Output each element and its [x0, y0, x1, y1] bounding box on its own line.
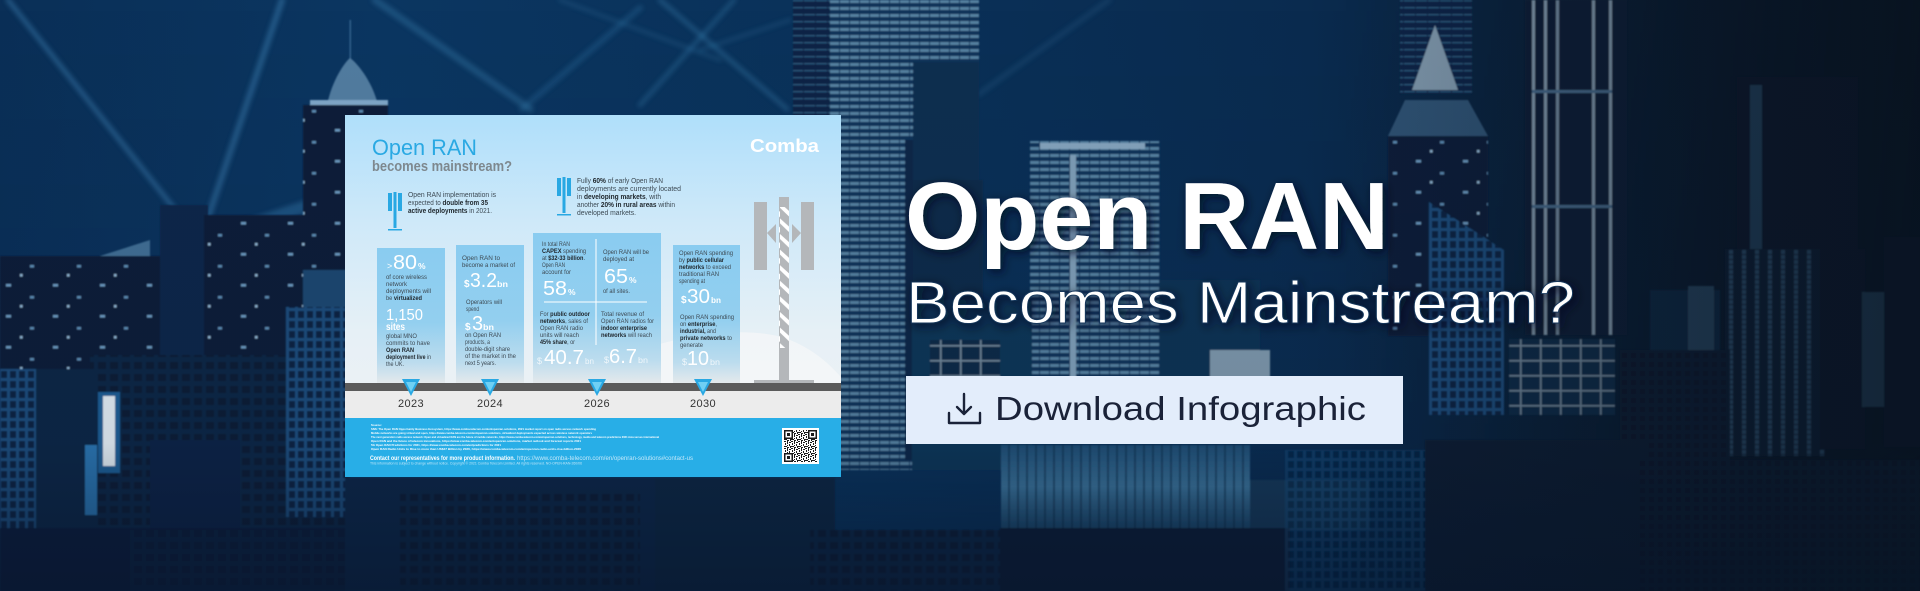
year labels: 2023	[398, 398, 424, 410]
sources text: Open RAN Radio Units to Rise to more than US$47 Billion by 2026, https://www.comba-telecom.com/en/openran-radio-units-rise-billion-2026	[371, 447, 581, 451]
card: 2023	[377, 248, 445, 383]
card: 2030: generate	[680, 343, 704, 349]
contact line: Contact our representatives for more product information.	[370, 455, 515, 462]
card: 2026: $	[537, 356, 542, 366]
year labels: 2026	[584, 398, 610, 410]
year labels: 2024	[477, 398, 503, 410]
card: 2026: 6.7	[609, 346, 637, 368]
card: 2026: 40.7	[544, 347, 584, 369]
text: developing markets note: in developing markets, with	[577, 194, 661, 201]
card: 2026: %	[629, 275, 637, 285]
card: 2026: bn	[585, 356, 594, 366]
QR code	[782, 428, 819, 464]
card: 2024: products, a	[465, 340, 491, 346]
panel: infographic thumbnail	[345, 115, 841, 477]
card: 2024: bn	[483, 322, 494, 332]
sources text: SNS: The Open RAN Opportunity Business Ecosystem, https://www.comba-telecom.com/en/openran-solutions, 2021 market report on open radio access network spending	[371, 427, 596, 431]
card: 2026: bn	[638, 355, 648, 365]
sources text: 5G Open RAN Predictions for 2021, https://www.comba-telecom.com/en/predictions for 2021	[371, 443, 501, 447]
card: 2024: 3	[472, 313, 483, 335]
card: 2023: 1,150	[386, 307, 423, 324]
contact URL: https://www.comba-telecom.com/en/openran-solutions#contact-us	[517, 455, 694, 462]
card: 2026: networks, sales of	[540, 319, 588, 325]
Comba logo: Comba	[750, 136, 820, 156]
card: 2026: Open RAN	[542, 263, 565, 269]
marker 2030	[694, 379, 712, 396]
sources text: Open RAN and the future of telecom innovations, https://www.comba-telecom.com/en/openran-solutions, market outlook and forecast reports 2021	[371, 439, 581, 443]
card: 2026: Open RAN radios for	[601, 319, 654, 325]
card: 2026: In total RAN	[542, 242, 570, 248]
card: 2026: 45% share, or	[540, 340, 575, 346]
card: 2030: 10	[687, 348, 709, 370]
year labels	[398, 398, 716, 410]
tall central tower	[793, 0, 983, 470]
sources text	[371, 423, 659, 451]
card: 2026: units will reach	[540, 333, 579, 339]
card: 2030: Open RAN spending	[680, 315, 734, 321]
card: 2030	[673, 245, 740, 383]
marker 2026	[588, 379, 606, 396]
searchlight rays	[8, 0, 1109, 494]
icon: download	[949, 394, 980, 423]
subheading: becomes mainstream?	[372, 158, 512, 175]
sources text: Mobile networks are going virtual and open, https://www.comba-telecom.com/en/openran-solutions, virtualized deployments expected across wireless network operators	[371, 431, 592, 435]
marker 2024	[481, 379, 499, 396]
card: 2026: account for	[542, 270, 571, 276]
card: 2024: become a market of	[462, 263, 515, 269]
icon: small antenna 1	[388, 192, 402, 230]
card: 2026: CAPEX spending	[542, 249, 586, 255]
card: 2026: 58	[543, 278, 567, 300]
card: 2026: networks will reach	[601, 333, 652, 339]
card: 2026: Open RAN radio	[540, 326, 584, 332]
footer	[345, 418, 841, 477]
building behind headline	[912, 141, 1270, 470]
card: 2023: 80	[393, 252, 417, 274]
card: 2026: Total revenue of	[601, 312, 644, 318]
card: 2023: global MNO	[386, 334, 417, 340]
card: 2024: $	[464, 279, 470, 290]
text: developing markets note: Fully 60% of early Open RAN	[577, 178, 663, 185]
icon: small antenna 2	[557, 177, 571, 216]
year labels: 2030	[690, 398, 716, 410]
card: 2030: by public cellular	[679, 258, 725, 264]
title line: Open RAN: Open RAN	[905, 163, 1389, 270]
card: 2026	[533, 233, 661, 383]
text: implementation note	[408, 192, 496, 215]
card: 2023: Open RAN	[386, 348, 414, 354]
card: 2023: deployment live in	[386, 355, 431, 361]
text: implementation note: expected to double from 35	[408, 200, 488, 207]
card: 2026: deployed at	[603, 257, 634, 263]
foreground rooftops	[0, 440, 1920, 591]
text: implementation note: Open RAN implementation is	[408, 192, 496, 199]
card: 2030: private networks to	[680, 336, 733, 342]
card: 2024	[456, 245, 524, 383]
card: 2023: %	[418, 261, 426, 271]
sources text: Source:	[371, 423, 382, 427]
legal line: This information is subject to change without notice. Copyright © 2021 Comba Telecom Limited. All rights reserved. NO-OPEN-RAN-260/06	[370, 462, 582, 466]
card: 2024: $	[465, 322, 471, 333]
card: 2023: network	[386, 282, 408, 288]
spire tower	[1388, 0, 1488, 336]
download button	[906, 376, 1403, 444]
card: 2030: networks to exceed	[679, 265, 731, 271]
card: 2030: bn	[710, 357, 720, 367]
card: 2024: on Open RAN	[465, 333, 501, 339]
card: 2026: 65	[604, 266, 628, 288]
card: 2024: of the market in the	[465, 354, 517, 360]
timeline	[345, 379, 841, 418]
domed tower	[303, 20, 388, 310]
card: 2030: industrial, and	[680, 329, 716, 335]
card: 2030: $	[682, 357, 687, 367]
card: 2030: bn	[711, 295, 721, 305]
card: 2030: on enterprise,	[680, 322, 717, 328]
card: 2026: %	[568, 287, 576, 297]
marker 2023	[402, 379, 420, 396]
icon: large grey antenna	[754, 197, 814, 383]
striped twin tower	[1525, 0, 1627, 335]
button label: Download Infographic	[995, 390, 1366, 427]
card: 2023: commits to have	[386, 341, 431, 347]
card: 2026: Open RAN will be	[603, 250, 650, 256]
card: 2024: next 5 years.	[465, 361, 496, 367]
card: 2030: Open RAN spending	[679, 251, 733, 257]
headline	[905, 163, 1575, 336]
card: 2024: Open RAN to	[462, 256, 501, 262]
text: developing markets note: another 20% in rural areas within	[577, 202, 675, 209]
card: 2023: >	[387, 261, 392, 271]
card: 2026: $	[604, 355, 609, 365]
subtitle line: Becomes Mainstream?	[906, 270, 1575, 336]
left skyline block	[0, 205, 350, 556]
card: 2024: 3.2	[470, 270, 497, 292]
card: 2024: spend	[466, 307, 479, 313]
card: 2023: the UK.	[386, 362, 404, 368]
text: developing markets note	[577, 178, 681, 217]
centre-left office block	[286, 307, 348, 517]
card: 2024: double-digit share	[465, 347, 511, 353]
text: implementation note: active deployments in 2021.	[408, 208, 492, 215]
text: developing markets note: deployments are currently located	[577, 186, 681, 193]
heading: Open RAN: Open RAN	[372, 135, 477, 160]
card: 2023: sites	[386, 322, 405, 333]
card: 2026: indoor enterprise	[601, 326, 648, 332]
card: 2026: For public outdoor	[540, 312, 591, 318]
card: 2023: deployments will	[386, 289, 431, 295]
card: 2024: bn	[497, 279, 508, 289]
background hill shapes	[560, 332, 841, 383]
card: 2026: at $32-33 billion.	[542, 256, 585, 262]
triangular-top tower	[1429, 202, 1504, 415]
card: 2024: Operators will	[466, 300, 502, 306]
sources text: The next generation radio access network: Open and virtualized RAN are the future of mobile networks, https://www.comba-telecom.com/en/openran-solutions, technology, media and telecom predictions 2021 Asia versus international	[371, 435, 659, 439]
card: 2030: 30	[687, 286, 710, 308]
card: 2030: traditional RAN	[679, 272, 719, 278]
card: 2026: of all sites.	[603, 289, 630, 295]
text: developing markets note: developed markets.	[577, 210, 636, 217]
card: 2023: be virtualized	[386, 296, 422, 302]
lower glowing podium	[1001, 445, 1370, 530]
right dark towers	[1620, 77, 1920, 460]
card: 2030: spending at	[679, 279, 705, 285]
card: 2023: of core wireless	[386, 275, 427, 281]
grid facade block	[1509, 339, 1615, 415]
card: 2030: $	[681, 295, 687, 306]
